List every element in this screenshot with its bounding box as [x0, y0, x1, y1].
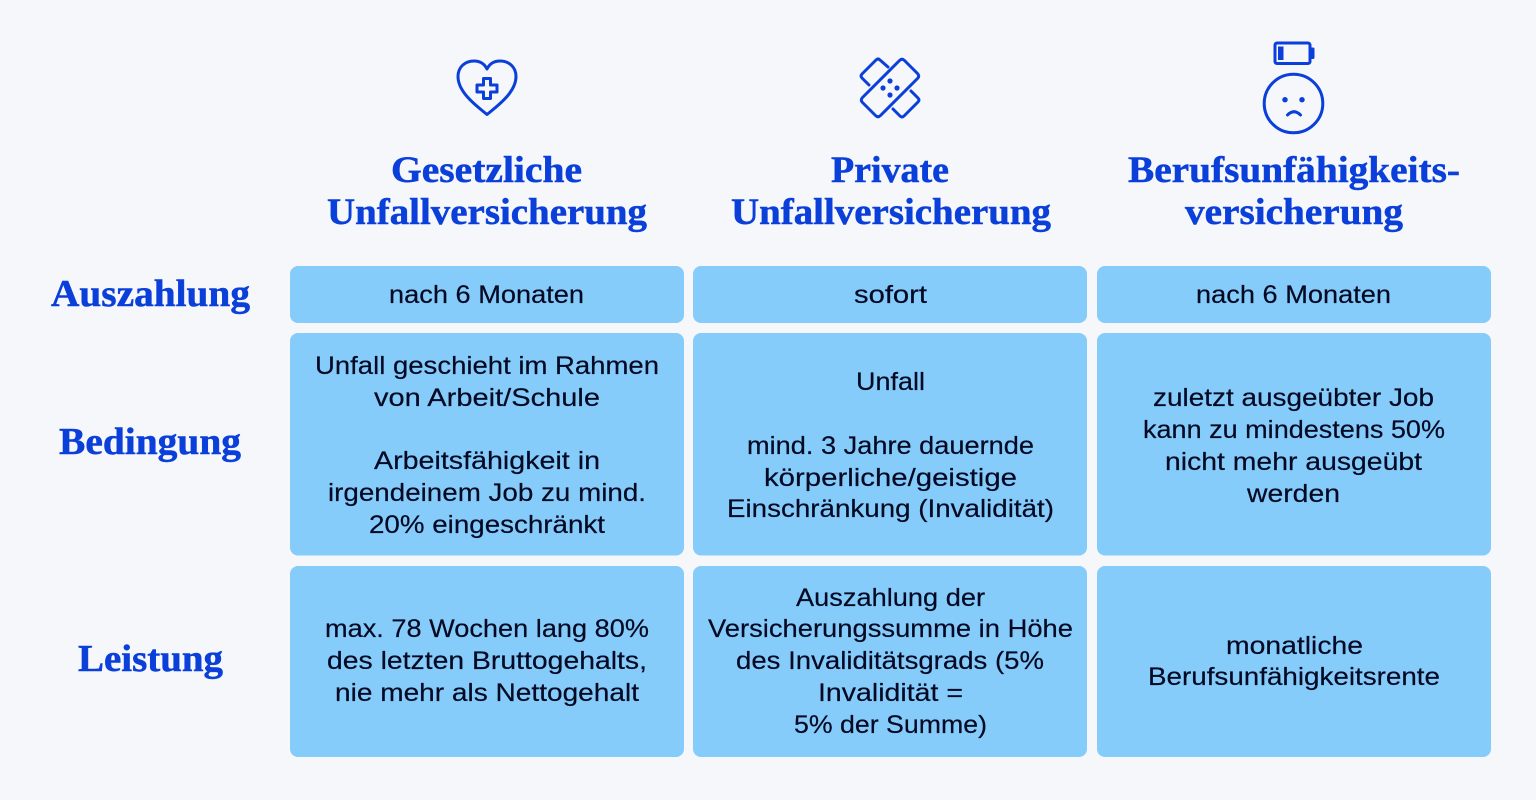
- cell: Bedingung, Private: mind. 3 Jahre dauernde: [747, 432, 1034, 460]
- cell: Leistung, Gesetzliche: [290, 566, 684, 757]
- cell: Leistung, Private: Auszahlung der: [796, 584, 985, 612]
- cell: Leistung, Berufsunfähigkeit: monatliche: [1226, 632, 1363, 660]
- cell: Bedingung, Private: körperliche/geistige: [764, 464, 1017, 492]
- heading: Berufsunfähigkeitsversicherung: versicherung: [1185, 192, 1404, 233]
- cell: Auszahlung, Private: [693, 266, 1087, 323]
- cell: Bedingung, Gesetzliche: irgendeinem Job zu mind.: [328, 479, 646, 507]
- icon: crossed bandages: [861, 59, 919, 117]
- heading: Gesetzliche Unfallversicherung: Unfallversicherung: [327, 192, 648, 233]
- heading: Private Unfallversicherung: Unfallversicherung: [731, 192, 1052, 233]
- cell: Auszahlung, Gesetzliche: [290, 266, 684, 323]
- column: Gesetzliche Unfallversicherung header: [327, 61, 648, 233]
- row label: Leistung: Leistung: [78, 638, 223, 680]
- cell: Leistung, Private: Versicherungssumme in Höhe: [708, 615, 1073, 643]
- cell: Leistung, Private: Invalidität =: [818, 679, 963, 707]
- cell: Auszahlung, Berufsunfähigkeit: [1097, 266, 1491, 323]
- cell: Auszahlung, Private: sofort: [854, 281, 927, 309]
- cell: Bedingung, Private: Einschränkung (Invalidität): [727, 495, 1054, 523]
- cell: Leistung, Berufsunfähigkeit: Berufsunfähigkeitsrente: [1148, 663, 1440, 691]
- cell: Leistung, Private: des Invaliditätsgrads (5%: [736, 647, 1044, 675]
- column: Private Unfallversicherung header: [731, 59, 1052, 233]
- icon: low battery and sad face: [1264, 43, 1323, 133]
- cell: Bedingung, Private: Unfall: [856, 368, 925, 396]
- icon: heart with plus: [458, 61, 516, 114]
- cell: Bedingung, Gesetzliche: Unfall geschieht im Rahmen: [315, 352, 659, 380]
- cell: Bedingung, Gesetzliche: Arbeitsfähigkeit in: [374, 447, 600, 475]
- cell: Bedingung, Gesetzliche: 20% eingeschränkt: [369, 511, 605, 539]
- cell: Leistung, Gesetzliche: nie mehr als Nettogehalt: [335, 679, 639, 707]
- column: Berufsunfähigkeitsversicherung header: [1128, 43, 1460, 233]
- heading: Berufsunfähigkeitsversicherung: Berufsunfähigkeits-: [1128, 150, 1460, 191]
- cell: Bedingung, Berufsunfähigkeit: [1097, 333, 1491, 556]
- cell: Auszahlung, Gesetzliche: nach 6 Monaten: [389, 281, 584, 309]
- cell: Leistung, Berufsunfähigkeit: [1097, 566, 1491, 757]
- heading: Berufsunfähigkeitsversicherung: [1128, 150, 1460, 233]
- cell: Bedingung, Berufsunfähigkeit: kann zu mindestens 50%: [1143, 416, 1445, 444]
- row label: Bedingung: Bedingung: [59, 421, 241, 463]
- cell: Leistung, Gesetzliche: max. 78 Wochen lang 80%: [325, 615, 649, 643]
- cell: Leistung, Gesetzliche: des letzten Bruttogehalts,: [327, 647, 647, 675]
- cell: Bedingung, Private: [693, 333, 1087, 556]
- cell: Leistung, Private: [693, 566, 1087, 757]
- row label: Auszahlung: Auszahlung: [51, 273, 250, 315]
- cell: Bedingung, Berufsunfähigkeit: nicht mehr ausgeübt: [1165, 448, 1422, 476]
- cell: Bedingung, Gesetzliche: von Arbeit/Schule: [374, 384, 600, 412]
- heading: Gesetzliche Unfallversicherung: Gesetzliche: [391, 150, 582, 191]
- heading: Gesetzliche Unfallversicherung: [327, 150, 648, 233]
- heading: Private Unfallversicherung: [731, 150, 1052, 233]
- cell: Auszahlung, Berufsunfähigkeit: nach 6 Monaten: [1196, 281, 1391, 309]
- cell: Bedingung, Berufsunfähigkeit: zuletzt ausgeübter Job: [1153, 384, 1434, 412]
- heading: Private Unfallversicherung: Private: [831, 150, 949, 191]
- cell: Leistung, Private: 5% der Summe): [794, 711, 987, 739]
- cell: Bedingung, Berufsunfähigkeit: werden: [1246, 480, 1340, 508]
- cell: Bedingung, Gesetzliche: [290, 333, 684, 556]
